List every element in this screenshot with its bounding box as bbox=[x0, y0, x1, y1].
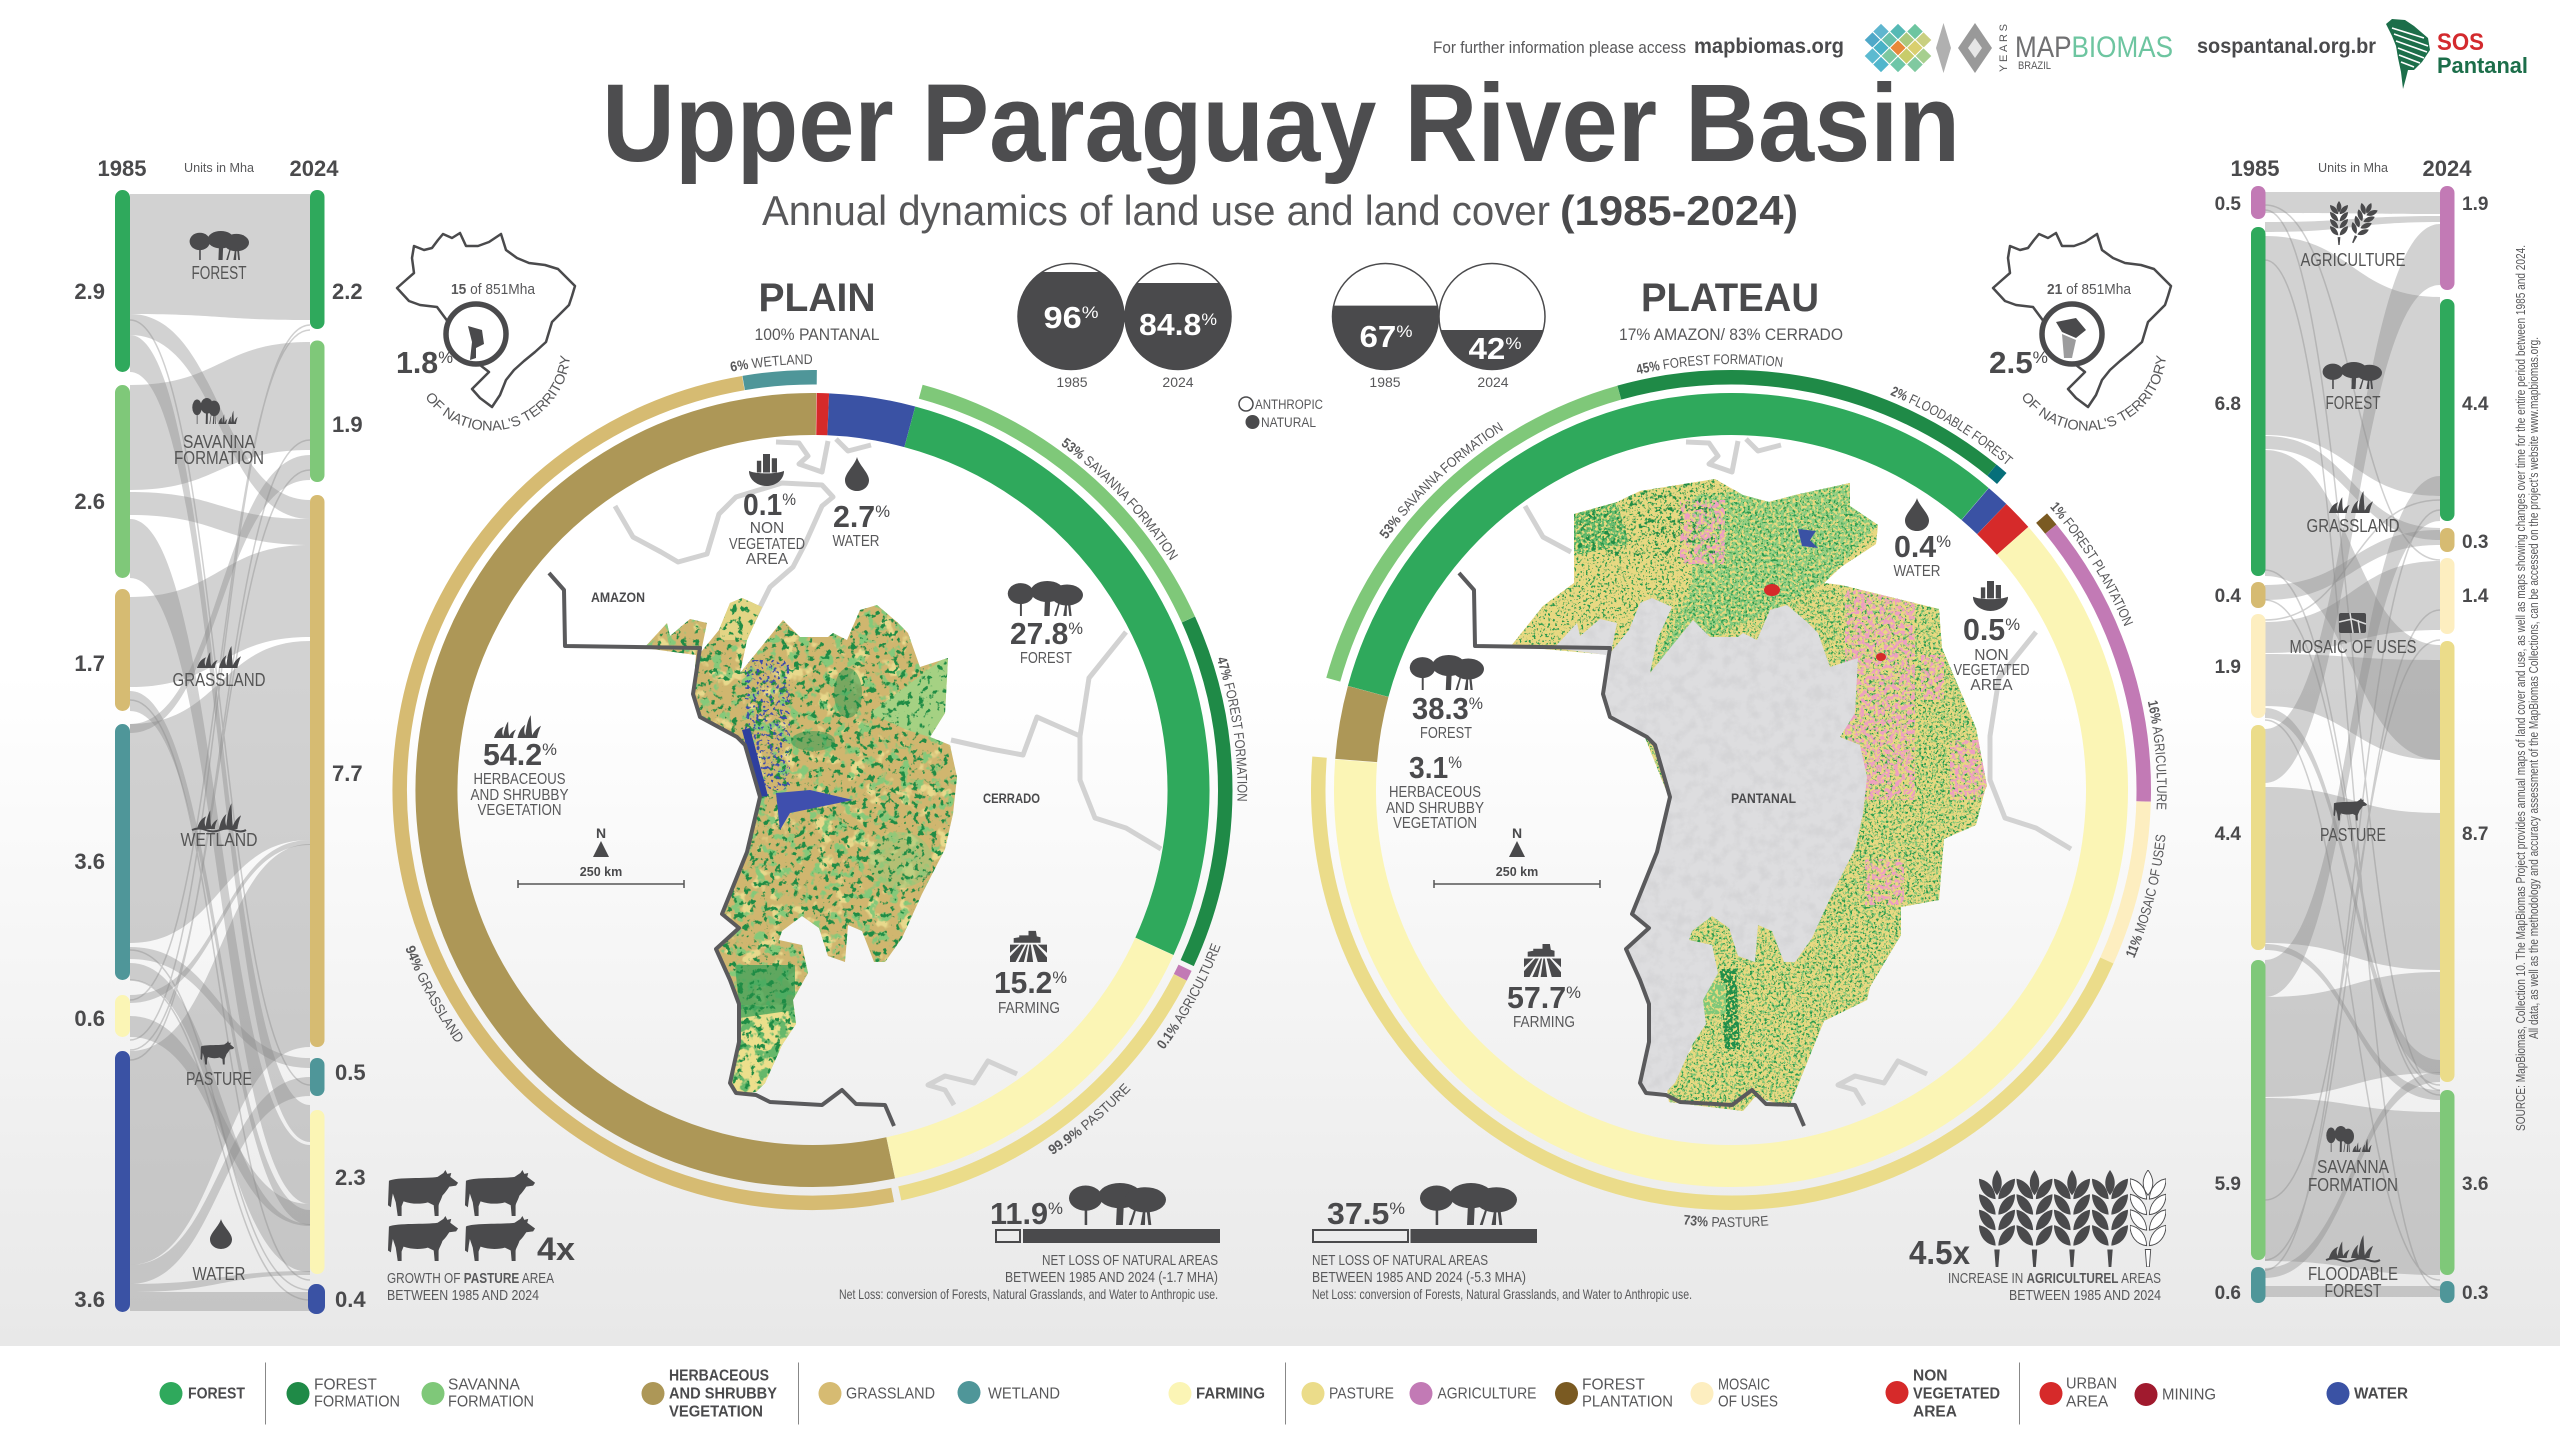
ring labels: plain bbox=[406, 354, 1248, 1154]
area text: 15 of 851Mha bbox=[451, 281, 536, 298]
stat: farming: 15.2 bbox=[994, 965, 1054, 1000]
logo: sos pantanal bbox=[2386, 19, 2528, 89]
callout: pasture growth: GROWTH OF PASTURE AREA bbox=[387, 1270, 554, 1287]
label: forest bbox=[190, 231, 249, 283]
ring labels: plain: 53% SAVANNA FORMATION bbox=[1062, 438, 1178, 560]
stat: water bbox=[1894, 498, 1951, 580]
discs: plain natural share bbox=[1018, 264, 1231, 390]
values 2024: 3.6 bbox=[2462, 1174, 2488, 1195]
label: forest bbox=[2323, 362, 2382, 413]
north arrow and scale: N bbox=[1512, 825, 1522, 841]
legend: forest group: SAVANNA bbox=[448, 1376, 520, 1394]
ring labels: plain: 6% WETLAND bbox=[730, 354, 812, 372]
sankey headers: 1985 bbox=[98, 156, 146, 181]
panel: left sankey plain bbox=[74, 156, 366, 1314]
stat: herbaceous bbox=[1386, 750, 1484, 832]
stat: herbaceous: VEGETATION bbox=[478, 802, 562, 819]
callout: net loss plain: % bbox=[1048, 1199, 1063, 1218]
ring labels: plateau: 2% FLOODABLE FOREST bbox=[1890, 386, 2014, 464]
label: floodable forest: FLOODABLE bbox=[2308, 1264, 2398, 1284]
stat: water: WATER bbox=[1894, 563, 1940, 580]
sankey flows bbox=[130, 194, 310, 1311]
label: agriculture: AGRICULTURE bbox=[2300, 250, 2406, 270]
stat: herbaceous: HERBACEOUS bbox=[474, 771, 566, 788]
stat: forest: 38.3 bbox=[1412, 691, 1472, 726]
disc 1985 bbox=[1332, 264, 1438, 390]
heading: plateau: PLATEAU bbox=[1641, 276, 1819, 320]
ring labels: plateau bbox=[1379, 354, 2167, 1228]
label: savanna formation: SAVANNA bbox=[183, 432, 255, 452]
2024 bars bbox=[2440, 186, 2454, 1303]
logo: mapbiomas 10 years: YEARS bbox=[1998, 24, 2010, 72]
stat: non vegetated: AREA bbox=[1970, 677, 2013, 694]
panel: plain map bbox=[549, 439, 1161, 1126]
legend: farming group: MOSAIC bbox=[1718, 1376, 1770, 1394]
values 2024: 0.4 bbox=[335, 1287, 366, 1312]
logo: mapbiomas 10 years: BRAZIL bbox=[2018, 60, 2051, 72]
values 1985: 3.6 bbox=[74, 1287, 105, 1312]
disc 1985: 1985 bbox=[1369, 374, 1401, 390]
stat: forest bbox=[1410, 655, 1484, 742]
legend: non vegetated group: URBAN bbox=[2066, 1376, 2117, 1392]
legend: non vegetated group: MINING bbox=[2162, 1386, 2216, 1404]
label: water: WATER bbox=[192, 1264, 246, 1284]
values 2024: 0.3 bbox=[2462, 532, 2488, 553]
2024 bars bbox=[308, 190, 325, 1314]
label: grassland bbox=[172, 646, 266, 690]
label: grassland bbox=[2306, 491, 2400, 536]
legend: water: WATER bbox=[2354, 1386, 2408, 1402]
label: grassland: GRASSLAND bbox=[172, 670, 266, 690]
source note bbox=[2514, 245, 2541, 1131]
label: cerrado: CERRADO bbox=[983, 791, 1040, 806]
discs: plateau natural share bbox=[1332, 264, 1545, 390]
legend: herbaceous group: GRASSLAND bbox=[846, 1386, 935, 1402]
legend: farming group bbox=[1168, 1362, 1778, 1424]
sankey headers: Units in Mha bbox=[2318, 160, 2389, 175]
callout: net loss plain: Net Loss: conversion of Forests, Natural Grasslands, and Water to Anthropic use. bbox=[839, 1286, 1218, 1302]
legend: non vegetated group: AREA bbox=[2066, 1394, 2109, 1410]
values 2024 bbox=[2462, 194, 2489, 1304]
locator circle bbox=[2042, 304, 2102, 364]
callout: pasture growth: 4x bbox=[537, 1231, 575, 1267]
callout: net loss plateau: BETWEEN 1985 AND 2024 (-5.3 MHA) bbox=[1312, 1269, 1526, 1286]
values 2024: 2.2 bbox=[332, 279, 363, 304]
stat: farming: FARMING bbox=[1513, 1014, 1575, 1031]
values 1985: 6.8 bbox=[2215, 394, 2241, 415]
label: wetland: WETLAND bbox=[180, 830, 258, 850]
stat: farming: FARMING bbox=[998, 1000, 1060, 1017]
stat: forest: % bbox=[1469, 694, 1483, 713]
ring labels: plateau: 11% MOSAIC OF USES bbox=[2126, 834, 2166, 958]
chart: plain donut outer ring bbox=[257, 235, 1368, 1345]
logo: mapbiomas 10 years bbox=[1864, 23, 2173, 73]
north arrow and scale: 250 km bbox=[1496, 865, 1538, 879]
stat: herbaceous: AND SHRUBBY bbox=[470, 787, 568, 804]
values 2024: 7.7 bbox=[332, 761, 363, 786]
chart: plain donut inner ring bbox=[314, 292, 1311, 1288]
legend: farming group: AGRICULTURE bbox=[1438, 1386, 1536, 1402]
label: grassland: GRASSLAND bbox=[2306, 516, 2400, 536]
stat: non vegetated bbox=[1954, 581, 2030, 694]
sankey flows bbox=[2265, 192, 2440, 1297]
stat: non vegetated: NON bbox=[1974, 647, 2009, 664]
stat: herbaceous: % bbox=[1448, 753, 1462, 772]
legend: farming group: OF USES bbox=[1718, 1394, 1778, 1410]
callout: net loss plain: NET LOSS OF NATURAL AREAS bbox=[1042, 1252, 1218, 1269]
callout: net loss plain bbox=[839, 1183, 1220, 1302]
callout: net loss plateau: NET LOSS OF NATURAL AREAS bbox=[1312, 1252, 1488, 1269]
legend: herbaceous group: HERBACEOUS bbox=[669, 1368, 769, 1384]
stat: forest: FOREST bbox=[1020, 650, 1072, 667]
stat: non vegetated: 0.5 bbox=[1963, 612, 2006, 647]
stat: non vegetated: % bbox=[782, 490, 796, 509]
brazil outline bbox=[1993, 233, 2171, 407]
panel: right sankey plateau bbox=[2215, 156, 2489, 1304]
heading: plain bbox=[754, 276, 880, 344]
legend: farming group: FARMING bbox=[1196, 1386, 1265, 1402]
values 1985: 0.5 bbox=[2215, 194, 2241, 215]
chart: plateau donut inner ring bbox=[1199, 258, 2263, 1322]
land cover map bbox=[1510, 475, 1990, 1115]
disc 2024 bbox=[1439, 264, 1545, 390]
chart: plateau donut outer ring bbox=[1149, 208, 2313, 1372]
map border line bbox=[1459, 573, 1804, 1126]
disc 1985: % bbox=[1396, 322, 1412, 341]
values 1985: 0.6 bbox=[74, 1006, 105, 1031]
legend: herbaceous group: AND SHRUBBY bbox=[669, 1386, 778, 1402]
stat: forest: FOREST bbox=[1420, 725, 1472, 742]
sankey headers: 2024 bbox=[290, 156, 339, 181]
callout: net loss plain: BETWEEN 1985 AND 2024 (-1.7 MHA) bbox=[1005, 1269, 1218, 1286]
land cover map bbox=[640, 590, 970, 1100]
heading: plateau bbox=[1619, 276, 1843, 344]
stat: water: % bbox=[1936, 532, 1951, 551]
stat: non vegetated: % bbox=[2005, 615, 2020, 634]
stat: non vegetated: VEGETATED bbox=[1954, 662, 2030, 679]
stat: non vegetated bbox=[729, 454, 805, 568]
values 2024: 2.3 bbox=[335, 1165, 366, 1190]
values 2024: 0.3 bbox=[2462, 1283, 2488, 1304]
legend: forest group bbox=[160, 1362, 534, 1424]
stat: forest: % bbox=[1068, 619, 1083, 638]
legend: herbaceous group: WETLAND bbox=[988, 1386, 1060, 1402]
values 1985: 3.6 bbox=[74, 849, 105, 874]
share value: 2.5 bbox=[1989, 345, 2032, 380]
legend: herbaceous group: VEGETATION bbox=[669, 1404, 763, 1420]
disc 1985: % bbox=[1082, 303, 1098, 322]
stat: forest: 27.8 bbox=[1010, 616, 1070, 651]
label: mosaic of uses bbox=[2290, 613, 2416, 657]
legend: farming group: PLANTATION bbox=[1582, 1394, 1673, 1410]
values 1985: 1.9 bbox=[2215, 657, 2241, 678]
stat: water: 0.4 bbox=[1894, 529, 1937, 564]
rivers bbox=[615, 439, 1161, 1105]
values 2024: 8.7 bbox=[2462, 824, 2488, 845]
stat: herbaceous: AND SHRUBBY bbox=[1386, 800, 1484, 817]
values 1985: 5.9 bbox=[2215, 1174, 2241, 1195]
north arrow and scale: 250 km bbox=[580, 865, 622, 879]
national territory label: OF NATIONAL'S TERRITORY bbox=[426, 355, 570, 431]
stat: non vegetated: 0.1 bbox=[743, 487, 786, 522]
stat: farming bbox=[994, 931, 1067, 1017]
ring labels: plain: 0.1% AGRICULTURE bbox=[1157, 943, 1220, 1048]
callout: agriculture increase bbox=[1909, 1170, 2166, 1304]
rivers bbox=[1525, 439, 2071, 1105]
legend: herbaceous group bbox=[642, 1362, 1060, 1424]
legend: non vegetated group: VEGETATED bbox=[1913, 1386, 2000, 1402]
ring labels: plateau: 45% FOREST FORMATION bbox=[1636, 354, 1783, 374]
mapbiomas url: mapbiomas.org bbox=[1694, 35, 1844, 58]
north arrow and scale bbox=[518, 825, 684, 888]
values 2024 bbox=[332, 279, 366, 1312]
title: Upper Paraguay River Basin bbox=[602, 62, 1960, 185]
sankey headers: 2024 bbox=[2423, 156, 2472, 181]
stat: water: 2.7 bbox=[833, 499, 876, 534]
label: savanna formation: SAVANNA bbox=[2317, 1157, 2389, 1177]
stats: plateau bbox=[1312, 498, 2166, 1304]
values 1985: 0.6 bbox=[2215, 1283, 2241, 1304]
logo: sos pantanal: SOS bbox=[2437, 29, 2484, 56]
label: amazon: AMAZON bbox=[591, 590, 645, 605]
label: floodable forest bbox=[2308, 1235, 2398, 1301]
share value: 1.8 bbox=[396, 345, 439, 380]
pantanal grey mask bbox=[1550, 590, 1880, 1100]
legend: anthropic and natural: NATURAL bbox=[1261, 415, 1316, 430]
callout: agriculture increase: INCREASE IN AGRICULTUREL AREAS bbox=[1948, 1270, 2161, 1287]
values 2024: 0.5 bbox=[335, 1060, 366, 1085]
label: pasture bbox=[2320, 798, 2386, 845]
legend: water bbox=[2326, 1382, 2408, 1405]
disc 2024 bbox=[1125, 264, 1231, 390]
legend: farming group: PASTURE bbox=[1329, 1386, 1394, 1402]
1985 bars bbox=[115, 190, 130, 1312]
national territory label: OF NATIONAL'S TERRITORY bbox=[2022, 355, 2166, 431]
header: further information and logos bbox=[1433, 19, 2528, 89]
legend: forest group: FOREST bbox=[314, 1376, 377, 1394]
further information text: For further information please access bbox=[1433, 39, 1686, 57]
ring labels: plateau: 53% SAVANNA FORMATION bbox=[1379, 422, 1504, 538]
ring labels: plain: 99.9% PASTURE bbox=[1048, 1083, 1131, 1154]
stat: non vegetated: VEGETATED bbox=[729, 536, 805, 553]
stat: herbaceous: HERBACEOUS bbox=[1389, 784, 1481, 801]
legend: forest group: FORMATION bbox=[448, 1394, 534, 1410]
callout: net loss plain: 11.9 bbox=[990, 1196, 1049, 1231]
values 2024: 1.9 bbox=[2462, 194, 2488, 215]
stat: herbaceous: % bbox=[542, 740, 557, 759]
heading: plain: PLAIN bbox=[758, 276, 876, 320]
stat: water: WATER bbox=[832, 533, 880, 550]
stat: herbaceous: 3.1 bbox=[1409, 750, 1452, 785]
label: pantanal: PANTANAL bbox=[1731, 791, 1796, 806]
sankey headers: 1985 bbox=[2231, 156, 2279, 181]
sankey headers: Units in Mha bbox=[184, 160, 255, 175]
logo: sos pantanal: Pantanal bbox=[2437, 53, 2528, 78]
sankey headers bbox=[98, 156, 339, 181]
brazil outline bbox=[397, 233, 575, 407]
legend: non vegetated group bbox=[1886, 1362, 2216, 1424]
disc 2024: % bbox=[1201, 310, 1217, 329]
share value: % bbox=[2033, 348, 2048, 367]
stat: forest bbox=[1008, 581, 1083, 667]
sos pantanal url: sospantanal.org.br bbox=[2197, 35, 2376, 58]
north arrow and scale: N bbox=[596, 825, 606, 841]
source note: SOURCE: MapBiomas, Collection 10. The MapBiomas Project provides annual maps of land cover and use, as well as maps showing changes over time for the entire period between 1985 and 2024. bbox=[2514, 245, 2528, 1131]
panel: plateau map bbox=[1459, 439, 2071, 1126]
ring labels: plateau: 16% AGRICULTURE bbox=[2148, 700, 2167, 810]
callout: pasture growth: BETWEEN 1985 AND 2024 bbox=[387, 1287, 539, 1304]
disc 2024: 2024 bbox=[1162, 374, 1194, 390]
label: floodable forest: FOREST bbox=[2324, 1281, 2382, 1301]
disc 1985 bbox=[1018, 264, 1124, 390]
subtitle: (1985-2024) bbox=[1560, 187, 1798, 234]
stat: farming: 57.7 bbox=[1507, 980, 1567, 1015]
area text: 21 of 851Mha bbox=[2047, 281, 2132, 298]
label: savanna formation: FORMATION bbox=[2308, 1175, 2398, 1195]
stat: water: % bbox=[875, 502, 890, 521]
values 1985 bbox=[2215, 194, 2241, 1304]
map border line bbox=[549, 573, 894, 1126]
stats: plain bbox=[387, 454, 1220, 1304]
label: savanna formation bbox=[174, 398, 264, 468]
ring labels: plain: 47% FOREST FORMATION bbox=[1218, 658, 1248, 801]
legend: anthropic and natural bbox=[1239, 397, 1323, 430]
callout: pasture growth bbox=[387, 1170, 575, 1304]
disc 1985: 67 bbox=[1360, 319, 1394, 354]
label: forest: FOREST bbox=[192, 263, 246, 283]
disc 2024: % bbox=[1505, 334, 1522, 353]
stat: herbaceous bbox=[470, 715, 568, 819]
values 1985 bbox=[74, 279, 105, 1312]
label: water bbox=[192, 1219, 246, 1284]
callout: net loss plateau: Net Loss: conversion of Forests, Natural Grasslands, and Water to Anthropic use. bbox=[1312, 1286, 1692, 1302]
stat: farming: % bbox=[1566, 983, 1581, 1002]
disc 1985: 1985 bbox=[1056, 374, 1088, 390]
brazil locator: plateau bbox=[1989, 232, 2172, 431]
values 1985: 0.4 bbox=[2215, 586, 2241, 607]
locator circle bbox=[446, 304, 506, 364]
legend: non vegetated group: NON bbox=[1913, 1368, 1947, 1384]
legend strip bbox=[160, 1362, 2408, 1424]
disc 1985: 96 bbox=[1044, 300, 1078, 335]
callout: agriculture increase: 4.5x bbox=[1909, 1234, 1971, 1271]
disc 2024: 42 bbox=[1468, 331, 1503, 366]
legend: forest group: FOREST bbox=[188, 1386, 245, 1402]
label: pasture bbox=[186, 1041, 252, 1089]
callout: agriculture increase: BETWEEN 1985 AND 2024 bbox=[2009, 1287, 2161, 1304]
legend strip background bbox=[0, 1346, 2560, 1438]
label: pasture: PASTURE bbox=[186, 1069, 252, 1089]
ring labels: plain: 94% GRASSLAND bbox=[406, 946, 462, 1042]
legend: non vegetated group: AREA bbox=[1913, 1404, 1957, 1420]
1985 bars bbox=[2251, 186, 2266, 1303]
callout: net loss plateau: % bbox=[1389, 1199, 1405, 1218]
values 2024: 1.4 bbox=[2462, 586, 2489, 607]
heading: plateau: 17% AMAZON/ 83% CERRADO bbox=[1619, 325, 1843, 344]
stat: herbaceous: VEGETATION bbox=[1393, 815, 1477, 832]
stat: farming: % bbox=[1052, 968, 1067, 987]
legend: forest group: FORMATION bbox=[314, 1394, 400, 1410]
label: wetland bbox=[180, 803, 258, 850]
disc 2024: 84.8 bbox=[1139, 307, 1199, 342]
legend: anthropic and natural: ANTHROPIC bbox=[1255, 397, 1323, 412]
disc 2024: 2024 bbox=[1477, 374, 1509, 390]
stat: non vegetated: AREA bbox=[746, 551, 789, 568]
stat: non vegetated: NON bbox=[750, 520, 784, 537]
brazil locator: plain bbox=[396, 232, 576, 431]
share value: % bbox=[438, 348, 453, 367]
label: savanna formation bbox=[2308, 1126, 2398, 1195]
legend: farming group: FOREST bbox=[1582, 1376, 1645, 1394]
stat: farming bbox=[1507, 944, 1581, 1031]
callout: net loss plateau bbox=[1312, 1183, 1692, 1302]
values 1985: 2.6 bbox=[74, 489, 105, 514]
subtitle: Annual dynamics of land use and land cover bbox=[762, 187, 1550, 234]
heading: plain: 100% PANTANAL bbox=[754, 325, 880, 344]
values 1985: 2.9 bbox=[74, 279, 105, 304]
label: forest: FOREST bbox=[2326, 393, 2380, 413]
logo: mapbiomas 10 years: MAPBIOMAS bbox=[2015, 31, 2173, 64]
ring labels: plateau: 73% PASTURE bbox=[1684, 1214, 1768, 1228]
source note: All data, as well as the methodology and accuracy assessment of the MapBiomas Collections, can be accessed on the project's website www.mapbiomas.org. bbox=[2527, 337, 2541, 1039]
values 1985: 4.4 bbox=[2215, 824, 2241, 845]
callout: net loss plateau: 37.5 bbox=[1327, 1196, 1387, 1231]
values 1985: 1.7 bbox=[74, 651, 105, 676]
stat: water bbox=[832, 457, 890, 550]
label: savanna formation: FORMATION bbox=[174, 448, 264, 468]
values 2024: 1.9 bbox=[332, 412, 363, 437]
stat: herbaceous: 54.2 bbox=[483, 737, 543, 772]
label: mosaic of uses: MOSAIC OF USES bbox=[2290, 637, 2416, 657]
north arrow and scale bbox=[1434, 825, 1600, 888]
label: pasture: PASTURE bbox=[2320, 825, 2386, 845]
label: agriculture bbox=[2300, 199, 2406, 270]
sankey headers bbox=[2231, 156, 2472, 181]
ring labels: plateau: 1% FOREST PLANTATION bbox=[2050, 502, 2134, 626]
values 2024: 4.4 bbox=[2462, 394, 2489, 415]
